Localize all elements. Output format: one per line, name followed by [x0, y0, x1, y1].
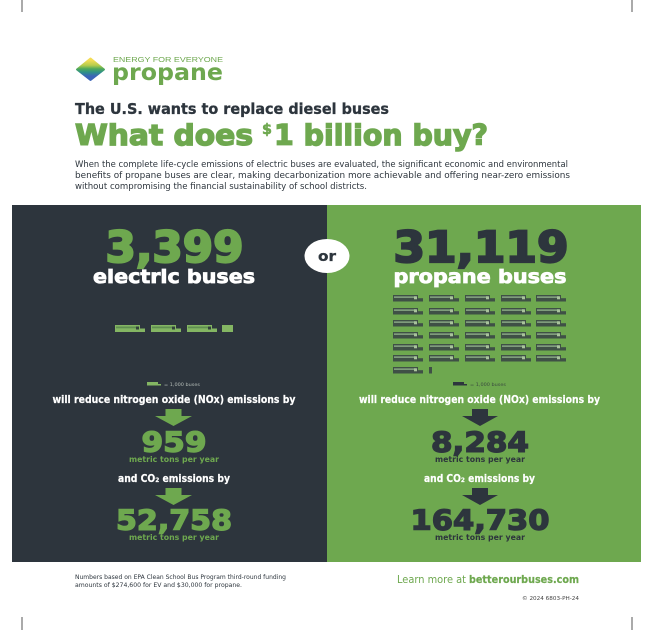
pictogram: propane buses	[393, 295, 566, 374]
CO2 unit: metric tons per year	[435, 532, 526, 542]
call to action	[397, 574, 579, 586]
call to action: Learn more at	[397, 574, 466, 586]
legend: propane: = 1,000 buses	[470, 382, 507, 388]
CO2 statement: and CO₂ emissions by	[424, 473, 535, 485]
electric buses label: electric buses	[93, 266, 255, 288]
or badge	[304, 239, 350, 273]
CO2 unit: metric tons per year	[129, 532, 220, 542]
NOx value: 959	[142, 426, 206, 458]
subtitle: The U.S. wants to replace diesel buses	[75, 100, 389, 118]
title	[75, 119, 488, 152]
NOx statement: will reduce nitrogen oxide (NOx) emissions by	[52, 394, 296, 406]
NOx value: 8,284	[431, 426, 529, 458]
panel: electric buses	[12, 205, 327, 562]
footnote: amounts of $274,600 for EV and $30,000 for propane.	[75, 582, 242, 589]
icon: propane diamond	[77, 58, 104, 80]
arrow	[155, 488, 192, 505]
copyright: © 2024 6803-PH-24	[522, 595, 579, 602]
pictogram: electric buses	[115, 325, 233, 332]
footnote: Numbers based on EPA Clean School Bus Program third-round funding	[75, 574, 286, 581]
legend: propane	[453, 382, 507, 388]
arrow	[155, 409, 192, 426]
CO2 value: 52,758	[116, 504, 232, 536]
NOx unit: metric tons per year	[435, 454, 526, 464]
electric bus count: 3,399	[106, 223, 244, 273]
NOx unit: metric tons per year	[129, 454, 220, 464]
NOx statement: will reduce nitrogen oxide (NOx) emissions by	[359, 394, 600, 406]
logo tagline: ENERGY FOR EVERYONE	[113, 55, 223, 64]
logo	[77, 55, 223, 86]
panel: propane buses	[327, 205, 641, 562]
footnote	[75, 574, 286, 589]
intro text: When the complete life-cycle emissions of electric buses are evaluated, the significant economic and environmental	[75, 160, 568, 170]
title: $	[262, 122, 272, 138]
CO2 value: 164,730	[410, 504, 550, 536]
intro text: without compromising the financial sustainability of school districts.	[75, 182, 367, 192]
propane buses label: propane buses	[394, 266, 566, 288]
CO2 statement: and CO₂ emissions by	[118, 473, 230, 485]
legend: electric: = 1,000 buses	[164, 382, 201, 388]
arrow	[462, 409, 498, 426]
or badge: or	[318, 249, 336, 265]
propane bus count: 31,119	[394, 223, 568, 273]
arrow	[462, 488, 498, 505]
legend: electric	[147, 382, 201, 388]
intro text: benefits of propane buses are clear, making decarbonization more achievable and offering near-zero emissions	[75, 171, 571, 181]
call to action: betterourbuses.com	[469, 574, 579, 586]
title: What does	[75, 119, 253, 152]
title: 1 billion buy?	[274, 119, 488, 152]
intro text	[75, 160, 571, 192]
logo wordmark: propane	[112, 60, 223, 86]
